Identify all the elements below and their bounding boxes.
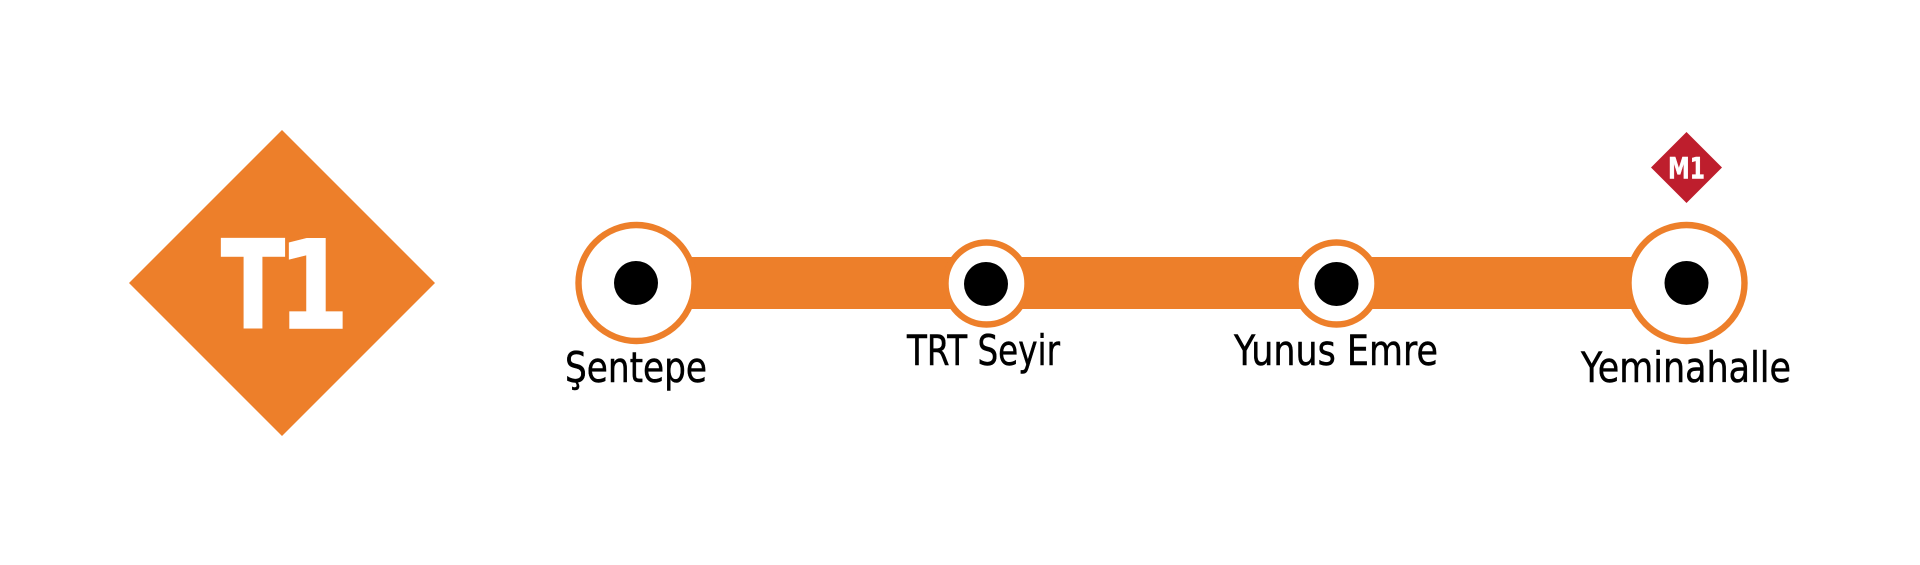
station: Yunus Emre [1233, 242, 1438, 375]
station: Şentepe: Şentepe [565, 343, 707, 392]
transfer badge: M1 [1651, 132, 1722, 203]
line badge: T1 [129, 130, 435, 436]
station: Yunus Emre: Yunus Emre [1233, 326, 1438, 375]
station: TRT Seyir: TRT Seyir [906, 326, 1061, 375]
transfer badge: M1: M1 [1668, 152, 1705, 186]
station: Şentepe [565, 225, 707, 392]
station: Yeminahalle: Yeminahalle [1580, 343, 1791, 392]
station: Yeminahalle [1580, 225, 1791, 392]
line badge: T1: 1 [278, 215, 349, 357]
line badge: T1: T [221, 215, 285, 357]
station: TRT Seyir [906, 242, 1061, 375]
route line bar [680, 257, 1645, 309]
